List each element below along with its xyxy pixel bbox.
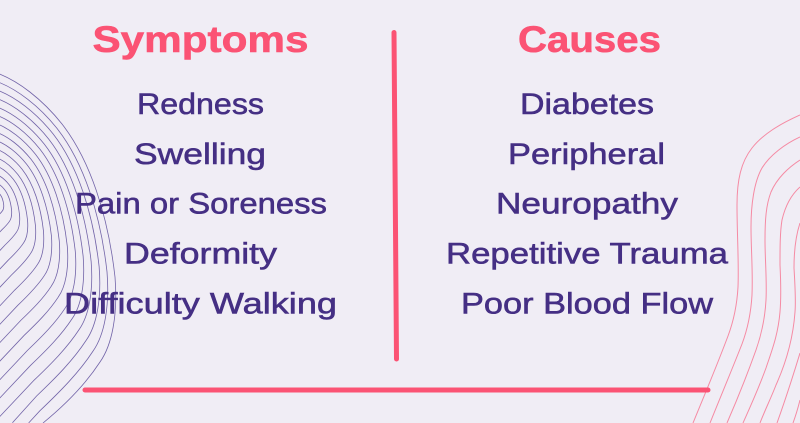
- heading: symptoms: Symptoms: [92, 19, 308, 60]
- decorative contour lines: right pink: [693, 115, 800, 423]
- causes list: Diabetes: [520, 88, 654, 121]
- symptoms list: Swelling: [134, 138, 266, 171]
- symptoms list: Difficulty Walking: [64, 288, 337, 320]
- decorative contour lines: left purple: [0, 72, 116, 423]
- symptoms list: Redness: [137, 88, 264, 121]
- vertical divider: [394, 32, 396, 359]
- heading: causes: Causes: [518, 19, 661, 60]
- symptoms list: Pain or Soreness: [75, 188, 327, 220]
- panel: causes: [446, 19, 728, 320]
- causes list: Peripheral: [508, 138, 665, 171]
- causes list: Repetitive Trauma: [446, 238, 728, 270]
- symptoms list: Deformity: [124, 238, 277, 270]
- symptoms list: [64, 88, 337, 320]
- horizontal rule: [85, 388, 708, 392]
- causes list: [446, 88, 728, 320]
- causes list: Poor Blood Flow: [461, 288, 713, 320]
- panel: symptoms: [64, 19, 337, 320]
- causes list: Neuropathy: [496, 188, 678, 220]
